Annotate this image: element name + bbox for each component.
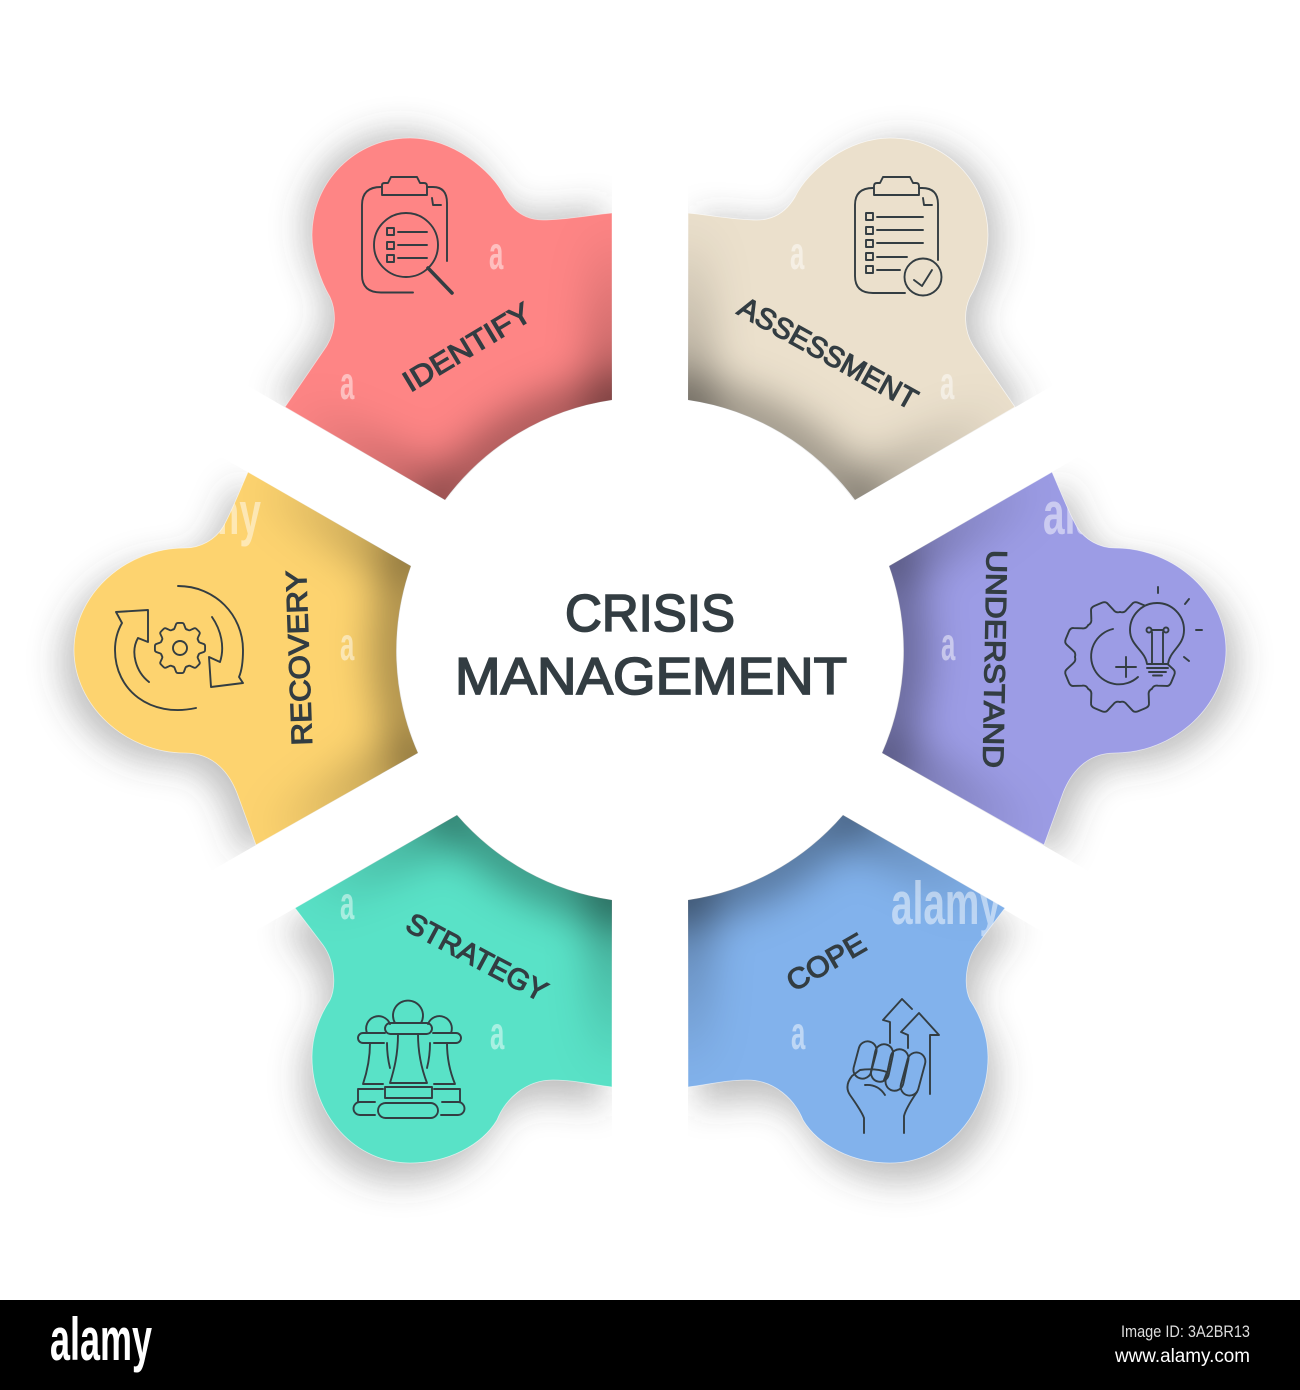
label: Cope: COPE [781, 928, 872, 998]
icon: clipboard with magnifier [362, 177, 452, 293]
watermark glyphs: a [340, 877, 355, 929]
title: CRISIS [565, 585, 735, 643]
petal: Identify [285, 138, 612, 500]
watermark glyphs: alamy [891, 870, 1001, 937]
footer logo: alamy [50, 1306, 152, 1373]
icon: chess pieces [354, 1001, 464, 1118]
footer bar [0, 1300, 1300, 1390]
petal: Cope [688, 815, 1005, 1163]
footer url: www.alamy.com [1114, 1346, 1250, 1367]
icon: checklist clipboard [855, 177, 942, 296]
watermark glyphs: a [791, 1007, 806, 1059]
petal: Strategy [295, 815, 612, 1163]
white spokes and hub masking the shadows [117, 90, 1182, 1210]
label: Assessment: ASSESSMENT [732, 291, 923, 416]
petal: Understand [882, 472, 1226, 845]
icon: fist with upward arrows [847, 999, 939, 1133]
label: Understand: UNDERSTAND [976, 550, 1012, 768]
label: Strategy: STRATEGY [401, 907, 552, 1008]
watermark glyphs: alamy [1043, 480, 1153, 547]
outer drop shadows of the petals [61, 131, 1239, 1183]
icon: gear and light bulb [1061, 587, 1202, 716]
inner shading cast by the hub and spokes [273, 244, 1024, 1056]
watermark glyphs: a [941, 618, 956, 670]
watermark glyphs: a [340, 357, 355, 409]
icon: gear with circular arrows [115, 586, 243, 710]
watermark glyphs: a [940, 357, 955, 409]
watermark glyphs: a [490, 1007, 505, 1059]
watermark glyphs: a [489, 227, 504, 279]
label: Recovery: RECOVERY [281, 570, 319, 746]
watermark glyphs: alamy [151, 480, 261, 547]
footer image id: Image ID: 3A2BR13 [1121, 1322, 1250, 1341]
watermark glyphs: a [790, 227, 805, 279]
watermark glyphs: a [340, 618, 355, 670]
petal: Recovery [74, 472, 418, 845]
label: Identify: IDENTIFY [398, 297, 537, 399]
title: MANAGEMENT [455, 648, 847, 706]
petal: Assessment [688, 138, 1015, 500]
watermark glyphs [151, 227, 1153, 1059]
title [455, 585, 847, 706]
